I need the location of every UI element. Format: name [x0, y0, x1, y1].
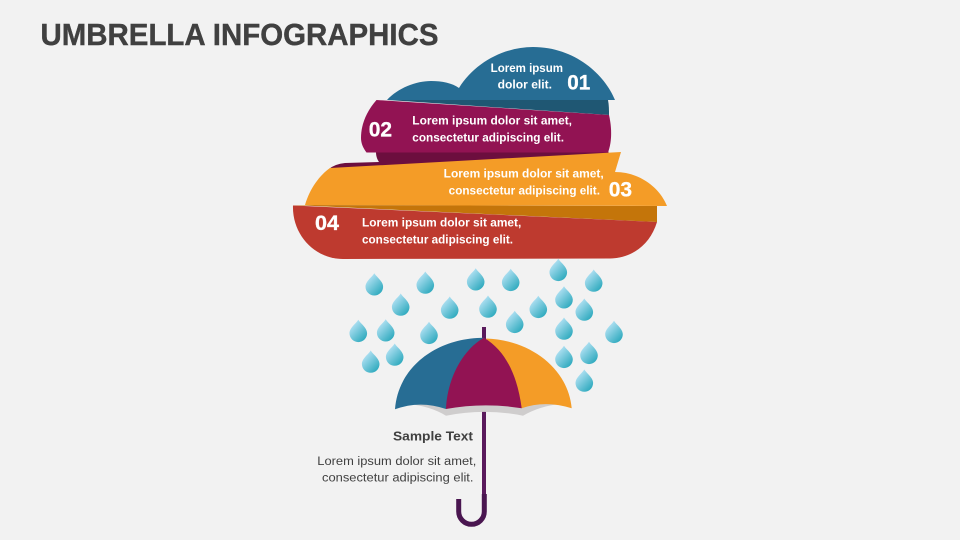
umbrella canopy: blue panel [395, 338, 484, 409]
band 03: orange [305, 152, 667, 206]
band 01: blue cloud top: dolor elit. [498, 80, 552, 92]
band 02: purple: consectetur adipiscing elit. [412, 133, 564, 145]
title: UMBRELLA INFOGRAPHICS [40, 17, 438, 52]
band 04: red: 04 [315, 212, 339, 235]
band 03: orange: 03 [609, 179, 632, 202]
cloud infographic [293, 47, 667, 259]
umbrella canopy shadow [408, 395, 560, 416]
band 04: red: consectetur adipiscing elit. [362, 235, 513, 247]
umbrella handle [459, 327, 486, 524]
band 02: purple: Lorem ipsum dolor sit amet, [412, 116, 572, 128]
band 01: blue cloud top: Lorem ipsum [491, 63, 563, 75]
sample text block: Lorem ipsum dolor sit amet, [317, 456, 476, 468]
band 01: blue cloud top: 01 [567, 71, 591, 94]
band 04: red: Lorem ipsum dolor sit amet, [362, 218, 521, 230]
band 02: purple [329, 100, 611, 169]
band 03: orange: consectetur adipiscing elit. [449, 186, 600, 198]
umbrella [395, 327, 572, 524]
band 03: orange: Lorem ipsum dolor sit amet, [444, 169, 604, 181]
umbrella canopy: purple panel [446, 338, 522, 409]
sample text block: Sample Text [393, 430, 474, 444]
sample text block [317, 430, 476, 485]
band 01: blue cloud top [387, 47, 615, 115]
band 04: red [293, 205, 657, 259]
band 02: purple: 02 [369, 119, 392, 142]
rain drops [350, 259, 623, 392]
umbrella canopy: orange panel [486, 338, 572, 408]
sample text block: consectetur adipiscing elit. [322, 473, 474, 485]
